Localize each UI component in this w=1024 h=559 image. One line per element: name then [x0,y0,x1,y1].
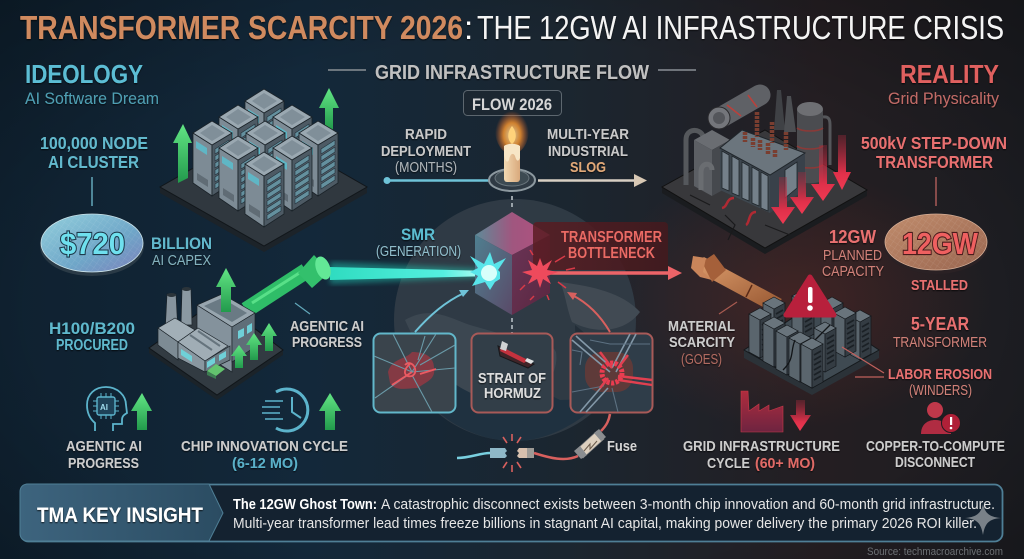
label box: transformer bottleneck: TRANSFORMER [561,229,662,246]
saw roof wing [178,328,228,361]
side box [686,130,730,196]
arrows: falling [771,135,851,224]
label: agentic ai progress center [290,303,364,351]
label: copper to compute: DISCONNECT [895,454,975,471]
title: : [464,9,473,46]
banner text: A catastrophic disconnect exists between 3-month chip innovation and 60-month grid infrastructure. [381,496,995,513]
wafer: 12gw: 12GW [902,226,979,261]
icon: candle [489,106,535,191]
label: stalled: STALLED [911,277,968,294]
label box: transformer bottleneck: BOTTLENECK [568,245,656,262]
label: rapid deployment: RAPID [405,126,447,143]
arc arrow: blue inset to cube [415,290,469,332]
label: 5-year transformer: TRANSFORMER [893,335,987,351]
label: 100,000 node cluster: AI CLUSTER [48,152,139,172]
icon: ai head [87,387,127,431]
label: billion ai capex: AI CAPEX [152,253,211,269]
label: multi-year slog: INDUSTRIAL [548,143,628,160]
label: rapid deployment [381,126,471,176]
label: h100/b200 procured [49,319,135,354]
label: material scarcity: SCARCITY [669,334,735,351]
label: smr generation: (GENERATION) [376,244,461,260]
banner text: The 12GW Ghost Town: [233,496,377,513]
connector: cluster to capex [91,177,93,206]
label: labor erosion: LABOR EROSION [888,366,992,383]
label: smr generation: SMR [401,225,435,244]
label: rapid deployment: (MONTHS) [395,160,457,176]
title: TRANSFORMER SCARCITY 2026 [20,9,463,46]
icon: tanker ship [498,341,534,368]
label: 12gw planned capacity: 12GW [829,227,876,247]
label: material scarcity: MATERIAL [668,318,735,335]
label: 5-year transformer [893,314,987,351]
label: fuse: Fuse [607,438,637,455]
label: agentic ai progress center: AGENTIC AI [290,318,364,335]
label: material scarcity: (GOES) [681,352,722,368]
insight banner [20,484,1002,542]
left wing [158,318,195,342]
arrow: multi-year slog [538,174,647,187]
label: agentic ai progress: AGENTIC AI [66,438,142,455]
badge: flow 2026 [464,90,562,116]
banner tag: TMA KEY INSIGHT [37,504,203,527]
label: smr generation [376,225,461,260]
icon: clock [262,389,308,431]
dashed connector [511,196,513,340]
pipe: copper [691,254,778,306]
label: material scarcity [668,302,737,368]
heading: grid infrastructure flow: GRID INFRASTRUCTURE FLOW [375,62,649,84]
banner tag [20,484,223,541]
label: copper to compute [866,438,1005,471]
heading: reality [888,59,999,108]
cracks [722,198,756,225]
label: multi-year slog [547,126,629,176]
label: h100/b200 procured: PROCURED [56,337,128,354]
icon: warning triangle [786,277,834,315]
icon: fuse [574,429,606,459]
burst: cyan [470,252,506,290]
label: grid infrastructure cycle: (60+ MO) [755,455,815,472]
pipe: green [246,254,334,310]
banner text [233,496,995,532]
icon: sparkle [965,504,1001,535]
label: 100,000 node cluster [40,133,148,172]
arrow: agentic up [131,393,152,430]
label: grid infrastructure cycle [683,438,840,472]
bushings [745,112,786,158]
label: 500kv transformer: 500kV STEP-DOWN [861,133,1007,153]
label: chip innovation cycle [181,438,348,472]
broken data center illustration [691,254,879,395]
tower tank [797,102,830,183]
stacks [774,90,785,130]
tank body [720,148,770,213]
heading: ideology: AI Software Dream [25,89,159,108]
icon: red factory [741,391,783,432]
transformer illustration [662,90,867,254]
label: 500kv transformer [861,133,1007,172]
label: agentic ai progress: PROGRESS [68,455,139,472]
connector: transformer to stalled [935,177,937,206]
label: grid infrastructure cycle: GRID INFRASTRUCTURE [683,438,840,455]
wafer: 12gw [884,214,988,274]
globe map [394,199,640,441]
label: chip innovation cycle: (6-12 MO) [232,455,298,472]
cube: bottleneck [475,212,550,315]
wafer: $720 [40,214,144,276]
burst: red [520,250,575,300]
inset: right congested map [570,334,652,412]
label: rapid deployment: DEPLOYMENT [381,143,471,160]
arrows: small up [231,345,247,368]
label: 12gw planned capacity [822,227,884,280]
source: Source: techmacroarchive.com [867,546,1003,558]
icon: person alert [921,402,960,434]
label: 500kv transformer: TRANSFORMER [876,152,993,172]
inset: strait of hormuz: STRAIT OF [478,371,546,387]
wafer: $720: $720 [60,226,125,261]
label: labor erosion: (WINDERS) [909,383,972,399]
arrow: grid cycle down [790,400,811,431]
label: 100,000 node cluster: 100,000 NODE [40,133,148,153]
label: billion ai capex [151,234,212,269]
label: grid infrastructure cycle: CYCLE [707,455,750,472]
label: labor erosion [842,347,992,399]
factory illustration [149,254,334,400]
label: agentic ai progress center: PROGRESS [292,334,362,351]
heading: ideology: IDEOLOGY [25,59,143,89]
heading: ideology [25,59,159,108]
arc arrow: right inset to cube [567,292,610,332]
heading: reality: Grid Physicality [888,89,999,108]
label: billion ai capex: BILLION [151,234,212,253]
label: agentic ai progress [66,438,142,472]
label: chip innovation cycle: CHIP INNOVATION CYCLE [181,438,348,455]
inset: blue city map [374,334,456,412]
main block [197,305,232,372]
label: multi-year slog: MULTI-YEAR [547,126,629,143]
beam: smr to cube [330,262,492,284]
chimneys [165,294,178,333]
banner text: Multi-year transformer lead times freeze billions in stagnant AI capital, making power delivery the primary 2026 ROI killer. [233,515,977,532]
title [20,9,1004,46]
inset: strait of hormuz [472,334,552,412]
flow line: rapid deployment [384,177,490,184]
badge: flow 2026: FLOW 2026 [472,95,552,114]
label: 12gw planned capacity: PLANNED [823,248,882,264]
arrow: growth right [319,88,339,130]
inset: strait of hormuz: HORMUZ [484,386,541,402]
arrow: chip cycle up [319,393,341,430]
label: multi-year slog: SLOG [570,159,606,176]
chip block [207,364,225,376]
label: 12gw planned capacity: CAPACITY [822,264,884,280]
arrow: main up [216,268,236,312]
broken cable and fuse [457,414,610,472]
label: h100/b200 procured: H100/B200 [49,319,135,338]
heading: reality: REALITY [900,59,999,89]
data center illustration [160,88,367,252]
label box: transformer bottleneck [533,222,668,270]
sparks [503,434,521,472]
arrow: growth left [173,124,192,183]
conservator [708,95,760,129]
label: 5-year transformer: 5-YEAR [911,314,969,334]
icon: ai head: AI [100,403,108,412]
arrow: bottleneck output [545,266,682,280]
